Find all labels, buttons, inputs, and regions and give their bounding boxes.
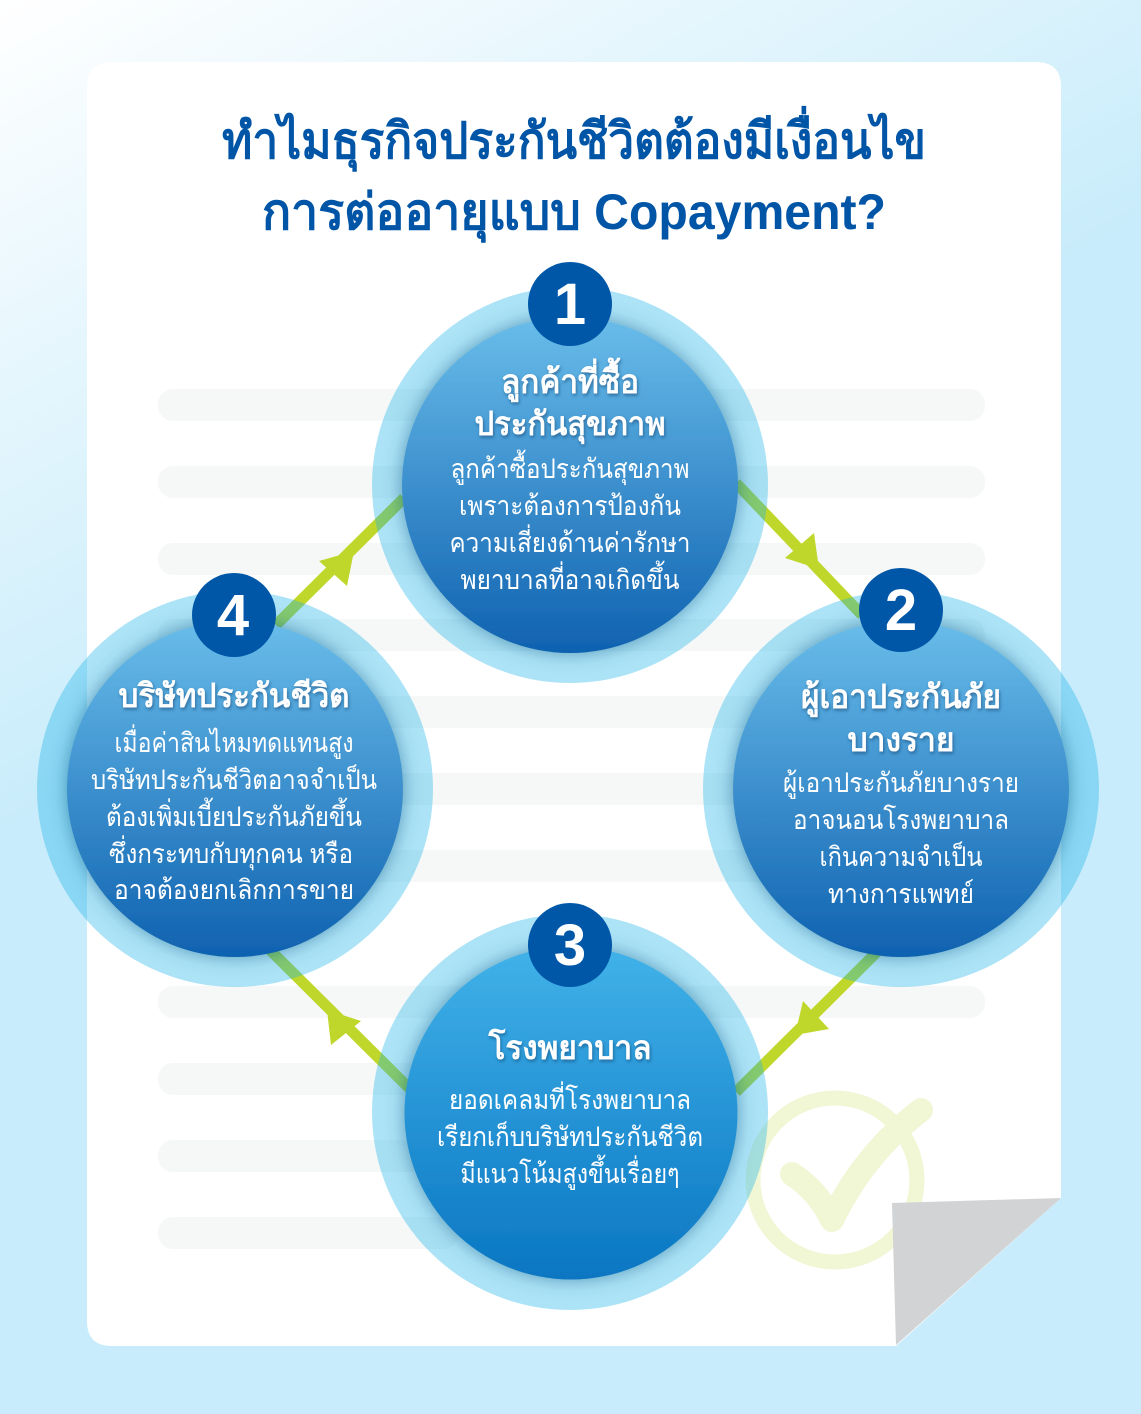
step 3 circle <box>372 903 768 1310</box>
body 3 <box>437 1081 703 1190</box>
page fold corner <box>892 1198 1061 1345</box>
heading 1: ประกันสุขภาพ <box>474 405 666 445</box>
body 3: มีแนวโน้มสูงขึ้นเรื่อยๆ <box>460 1154 680 1190</box>
heading 2 <box>801 678 1001 758</box>
heading 2: ผู้เอาประกันภัย <box>801 678 1001 718</box>
body 2: เกินความจำเป็น <box>820 839 982 872</box>
body 4: เมื่อค่าสินไหมทดแทนสูง <box>114 724 354 759</box>
step 4 circle <box>37 573 433 987</box>
badge 3 <box>528 903 612 987</box>
title: การต่ออายุแบบ Copayment? <box>262 184 886 243</box>
body 1 <box>450 449 690 595</box>
heading 3: โรงพยาบาล <box>488 1028 652 1066</box>
body 2: ทางการแพทย์ <box>828 878 974 909</box>
body 4: ต้องเพิ่มเบี้ยประกันภัยขึ้น <box>106 797 362 832</box>
heading 4: บริษัทประกันชีวิต <box>118 677 350 714</box>
document text lines <box>158 389 985 1249</box>
body 1: เพราะต้องการป้องกัน <box>459 491 681 521</box>
badge 4 <box>192 573 276 657</box>
body 2: อาจนอนโรงพยาบาล <box>793 805 1009 835</box>
heading 1 <box>474 357 666 445</box>
body 2: ผู้เอาประกันภัยบางราย <box>783 768 1019 799</box>
body 1: พยาบาลที่อาจเกิดขึ้น <box>460 560 680 595</box>
icon: check mark watermark <box>753 1098 921 1262</box>
heading 1: ลูกค้าที่ซื้อ <box>501 357 639 403</box>
step 1 circle <box>372 262 768 683</box>
badge 2: 2 <box>885 578 917 643</box>
body 4: ซึ่งกระทบกับทุกคน หรือ <box>109 835 353 871</box>
body 4 <box>91 724 377 905</box>
badge 1 <box>528 262 612 346</box>
arrow: 4 to 1 <box>276 498 404 625</box>
title <box>222 106 926 243</box>
body 3: เรียกเก็บบริษัทประกันชีวิต <box>437 1119 703 1152</box>
step 2 circle <box>703 568 1099 987</box>
heading 2: บางราย <box>848 721 954 758</box>
badge 3: 3 <box>554 913 586 978</box>
body 3: ยอดเคลมที่โรงพยาบาล <box>449 1081 691 1115</box>
badge 1: 1 <box>554 272 586 337</box>
arrow: 2 to 3 <box>736 950 879 1092</box>
arrow: 1 to 2 <box>736 483 862 615</box>
body 2 <box>783 768 1019 909</box>
paper sheet <box>87 62 1061 1346</box>
body 4: บริษัทประกันชีวิตอาจจำเป็น <box>91 762 377 795</box>
arrow: 3 to 4 <box>270 950 410 1089</box>
body 1: ความเสี่ยงด้านค่ารักษา <box>450 524 690 558</box>
body 1: ลูกค้าซื้อประกันสุขภาพ <box>450 449 690 486</box>
title: ทำไมธุรกิจประกันชีวิตต้องมีเงื่อนไข <box>222 106 926 172</box>
badge 2 <box>859 568 943 652</box>
badge 4: 4 <box>217 583 249 648</box>
body 4: อาจต้องยกเลิกการขาย <box>114 875 354 905</box>
